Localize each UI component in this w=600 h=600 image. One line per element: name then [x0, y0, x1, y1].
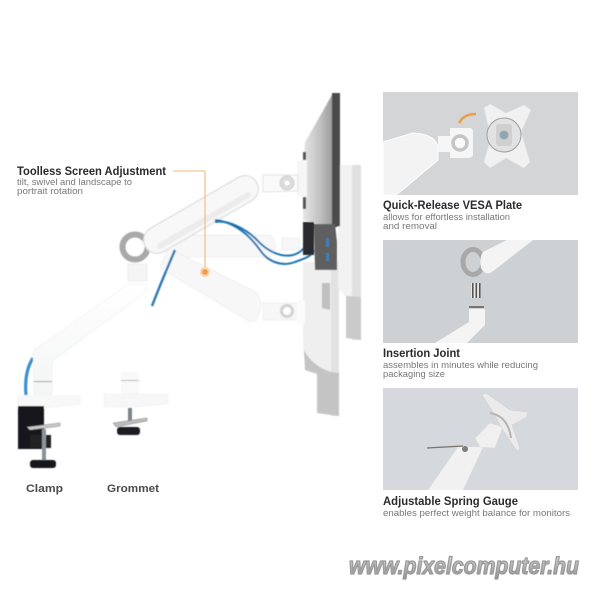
panel 1 description: allows for effortless installation — [383, 212, 510, 222]
clamp base — [18, 396, 80, 408]
shell slots — [303, 152, 306, 209]
vesa plate — [482, 393, 527, 451]
monitor arm product illustration — [18, 93, 361, 468]
tilt bracket — [263, 175, 298, 192]
ghost arm positions — [160, 235, 303, 322]
upper arm — [157, 189, 245, 240]
callout text: portrait rotation — [17, 186, 83, 196]
lower arm — [435, 309, 485, 343]
panel 2 heading: Insertion Joint — [383, 348, 460, 360]
orange arrow — [459, 114, 476, 123]
ring — [463, 250, 483, 274]
panel 3 heading: Adjustable Spring Gauge — [383, 496, 518, 508]
panel 1 heading: Quick-Release VESA Plate — [383, 200, 522, 212]
panel 2 description — [383, 360, 538, 379]
front monitor bezel — [332, 93, 340, 228]
panel 2 description: packaging size — [383, 369, 445, 379]
panel 1 description — [383, 212, 510, 231]
usb ports — [326, 238, 329, 261]
ring — [453, 136, 467, 150]
vesa mount — [297, 160, 307, 197]
callout leader line — [173, 171, 210, 277]
lower socket cap — [469, 306, 484, 308]
callout text — [17, 166, 166, 196]
insertion pins — [471, 283, 481, 298]
grommet mount — [104, 372, 168, 435]
panel: insertion joint — [383, 240, 578, 343]
ghost rear monitor — [322, 165, 361, 340]
panel: quick-release vesa plate — [383, 92, 578, 195]
panel: adjustable spring gauge — [383, 388, 578, 490]
plate arc — [490, 413, 511, 438]
ghost bracket — [297, 300, 305, 324]
lower arm — [33, 284, 146, 395]
cables — [215, 220, 314, 264]
callout text: tilt, swivel and landscape to — [17, 177, 132, 187]
plate center — [487, 118, 521, 152]
usb hub — [314, 224, 337, 270]
collar line — [34, 381, 52, 382]
joint ring — [122, 234, 148, 260]
lower arm cable — [26, 358, 33, 395]
clamp label: Clamp — [26, 483, 63, 495]
forearm bracket — [475, 423, 503, 448]
monitor rear dark section — [303, 222, 314, 255]
panel 1 description: and removal — [383, 221, 437, 231]
front monitor shell — [303, 93, 333, 228]
tilt joint — [280, 176, 294, 190]
grommet label: Grommet — [107, 483, 159, 495]
arm cable rising — [152, 250, 175, 306]
joint post — [128, 264, 147, 281]
upper arm — [480, 240, 533, 273]
ghost lowest monitor — [303, 262, 339, 416]
panel 3 description: enables perfect weight balance for monitors — [383, 508, 571, 518]
ghost joint ring — [282, 306, 292, 316]
bracket — [438, 128, 473, 158]
vesa plate — [484, 104, 531, 168]
arm — [383, 133, 438, 195]
arm — [428, 447, 483, 490]
panel 2 description: assembles in minutes while reducing — [383, 360, 538, 370]
tool — [427, 446, 468, 452]
callout text: Toolless Screen Adjustment — [17, 166, 166, 178]
clamp body — [18, 406, 44, 449]
clamp hardware — [27, 423, 60, 468]
